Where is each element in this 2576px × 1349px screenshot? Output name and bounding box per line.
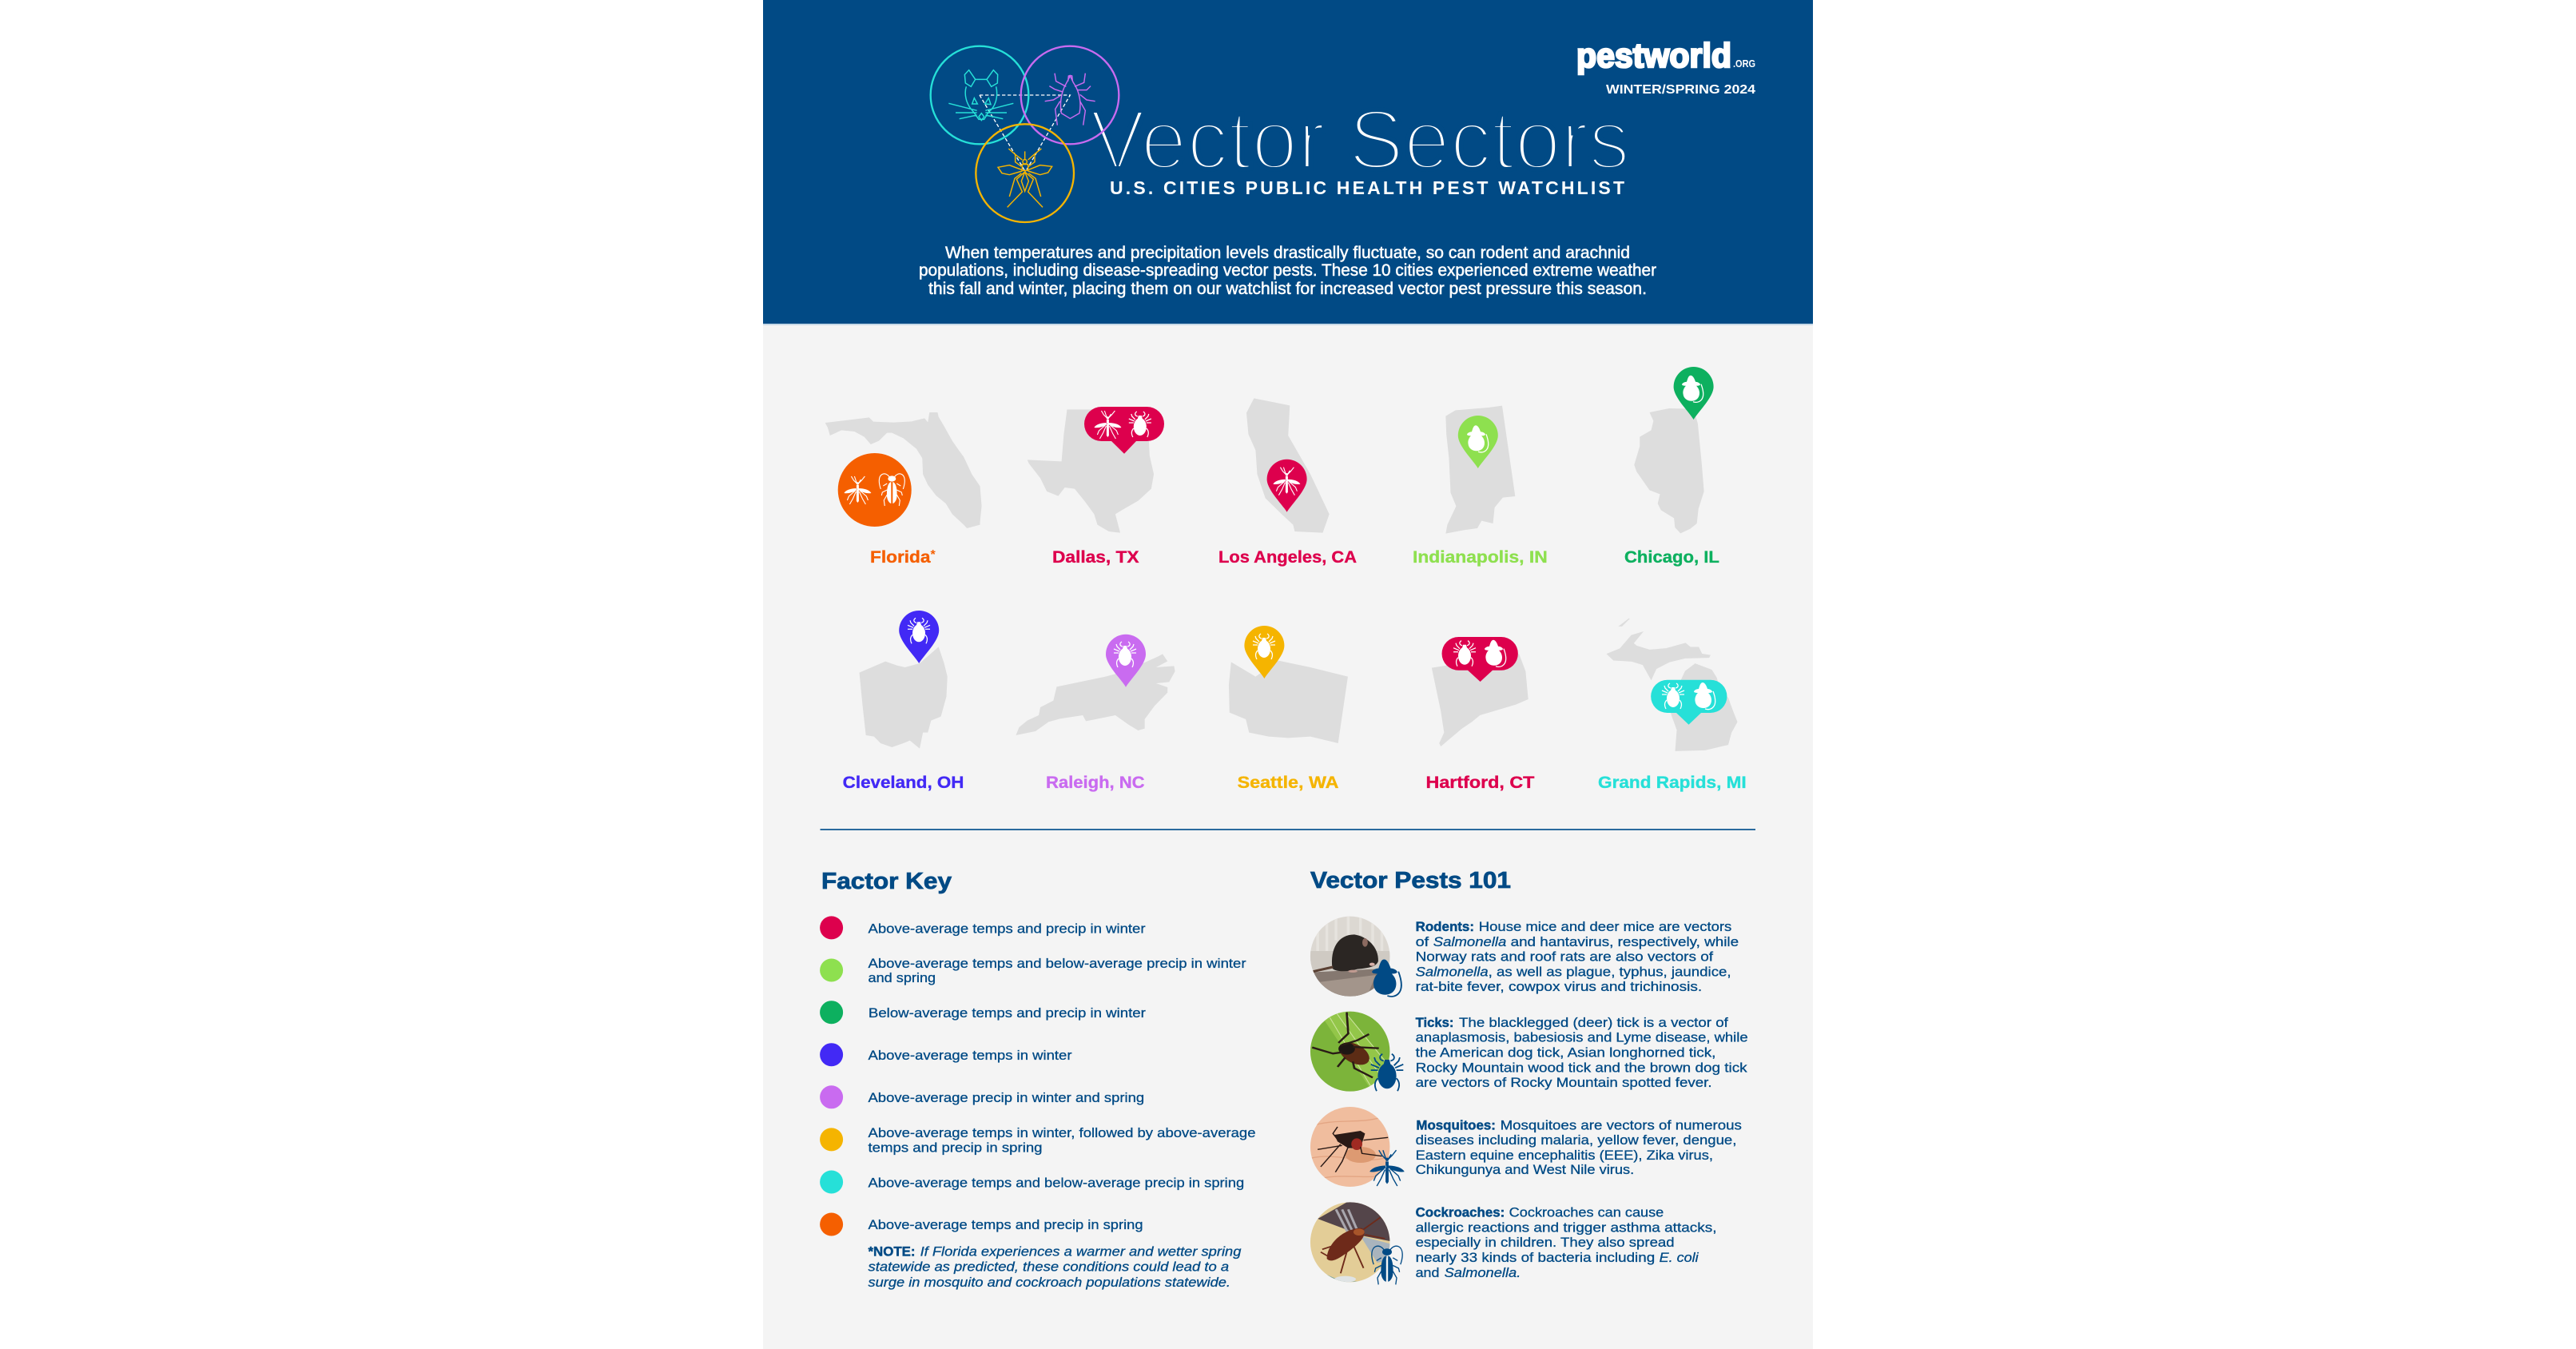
key row 7 bbox=[820, 1170, 1244, 1194]
note: surge in mosquito and cockroach populations statewide. bbox=[868, 1275, 1230, 1290]
map: Indiana bbox=[1445, 406, 1515, 534]
photo: tick bbox=[1309, 1009, 1391, 1093]
key row 8: Above-average temps and precip in spring bbox=[868, 1217, 1143, 1232]
key row 6: Above-average temps in winter, followed by above-average bbox=[868, 1125, 1256, 1140]
text: mosquitoes: Mosquitoes: bbox=[1416, 1117, 1496, 1132]
marker: Florida circle bbox=[838, 453, 912, 527]
label: Dallas: Dallas, TX bbox=[1052, 548, 1139, 567]
pest: cockroaches bbox=[1309, 1201, 1717, 1284]
photo: rat bbox=[1309, 915, 1391, 997]
panel: city maps bbox=[825, 367, 1747, 792]
marker: Cleveland pin bbox=[899, 611, 939, 663]
note: *NOTE: bbox=[868, 1244, 916, 1259]
heading: Factor Key: Factor Key bbox=[821, 869, 952, 894]
city: Grand Rapids bbox=[1598, 619, 1747, 792]
text: rodents: Salmonella bbox=[1416, 965, 1489, 980]
icon: mosquito bbox=[1369, 1150, 1405, 1186]
text: mosquitoes bbox=[1416, 1117, 1742, 1177]
text: ticks: The blacklegged (deer) tick is a vector of bbox=[1459, 1015, 1728, 1030]
title: Vector Sectors bbox=[1090, 93, 1630, 187]
city: Seattle bbox=[1229, 626, 1348, 792]
circle: yellow bbox=[976, 124, 1074, 222]
icon: rodent bbox=[1372, 960, 1401, 997]
key row 6: temps and precip in spring bbox=[868, 1140, 1042, 1156]
subtitle: U.S. CITIES PUBLIC HEALTH PEST WATCHLIST bbox=[1110, 177, 1624, 198]
icon: tick outline bbox=[1045, 74, 1095, 125]
marker: Seattle pin bbox=[1244, 626, 1284, 678]
text: rodents: rat-bite fever, cowpox virus and trichinosis. bbox=[1416, 979, 1702, 994]
text: rodents: Salmonella bbox=[1433, 934, 1506, 949]
note: statewide as predicted, these conditions could lead to a bbox=[868, 1259, 1229, 1274]
circle: teal bbox=[931, 46, 1028, 144]
intro text bbox=[919, 244, 1656, 298]
text: cockroaches: E. coli bbox=[1660, 1250, 1699, 1265]
marker: Chicago pin bbox=[1674, 367, 1714, 420]
map: Florida bbox=[825, 412, 982, 528]
text: ticks: the American dog tick, Asian longhorned tick, bbox=[1416, 1045, 1715, 1060]
label: Grand Rapids: Grand Rapids, MI bbox=[1598, 774, 1747, 792]
text: cockroaches: Cockroaches: bbox=[1416, 1205, 1505, 1220]
text: ticks: Rocky Mountain wood tick and the brown dog tick bbox=[1416, 1060, 1747, 1075]
city: Chicago bbox=[1624, 367, 1719, 567]
intro text: When temperatures and precipitation levels drastically fluctuate, so can rodent and arachnid bbox=[945, 244, 1630, 262]
text: cockroaches: Cockroaches can cause bbox=[1509, 1205, 1664, 1220]
map: Washington bbox=[1229, 661, 1348, 743]
text: ticks: are vectors of Rocky Mountain spotted fever. bbox=[1416, 1075, 1712, 1090]
photo: mosquito bbox=[1309, 1105, 1391, 1188]
map: Michigan bbox=[1607, 619, 1737, 750]
map: Ohio bbox=[860, 647, 948, 749]
key row 2 bbox=[820, 956, 1246, 985]
label: Florida: * bbox=[930, 548, 936, 562]
label: Indianapolis: Indianapolis, IN bbox=[1413, 548, 1548, 567]
key row 1: Above-average temps and precip in winter bbox=[868, 921, 1146, 936]
key row 6 bbox=[820, 1125, 1256, 1156]
emblem: three vector circles bbox=[931, 46, 1119, 222]
label: Seattle: Seattle, WA bbox=[1238, 774, 1339, 792]
text: rodents: and hantavirus, respectively, while bbox=[1511, 934, 1739, 949]
dashed connection triangle bbox=[980, 95, 1070, 172]
marker: Raleigh pin bbox=[1106, 635, 1146, 687]
text: rodents: Norway rats and roof rats are also vectors of bbox=[1416, 949, 1713, 965]
city: Indianapolis bbox=[1413, 406, 1548, 567]
label: Cleveland: Cleveland, OH bbox=[843, 774, 964, 792]
marker: Dallas bubble bbox=[1084, 407, 1164, 454]
pest: ticks bbox=[1309, 1009, 1748, 1093]
key row 2: Above-average temps and below-average precip in winter bbox=[868, 956, 1246, 971]
text: mosquitoes: Eastern equine encephalitis (EEE), Zika virus, bbox=[1416, 1148, 1713, 1163]
label: Los Angeles: Los Angeles, CA bbox=[1218, 548, 1357, 567]
key row 3: Below-average temps and precip in winter bbox=[869, 1005, 1146, 1021]
intro text: populations, including disease-spreading vector pests. These 10 cities experienced extreme weather bbox=[919, 261, 1656, 280]
label: Chicago: Chicago, IL bbox=[1624, 548, 1719, 567]
icon: tick bbox=[1371, 1054, 1403, 1091]
key row 4 bbox=[820, 1043, 1072, 1066]
panel: vector pests 101 bbox=[1309, 868, 1748, 1284]
key row 4: Above-average temps in winter bbox=[868, 1048, 1072, 1063]
note: If Florida experiences a warmer and wetter spring bbox=[920, 1244, 1242, 1259]
city: Florida bbox=[825, 412, 982, 567]
text: ticks bbox=[1416, 1015, 1748, 1090]
map: California bbox=[1246, 398, 1330, 533]
panel: factor key bbox=[820, 869, 1256, 1290]
text: cockroaches: and bbox=[1416, 1265, 1439, 1280]
key row 5: Above-average precip in winter and spring bbox=[868, 1090, 1144, 1105]
text: cockroaches bbox=[1416, 1205, 1717, 1280]
map: Connecticut bbox=[1432, 654, 1529, 746]
text: rodents: House mice and deer mice are vectors bbox=[1479, 919, 1731, 934]
circle: purple bbox=[1021, 46, 1119, 144]
icon: mosquito outline bbox=[998, 149, 1052, 207]
pest: rodents bbox=[1309, 915, 1739, 997]
city: Hartford bbox=[1425, 637, 1535, 792]
key row 3 bbox=[820, 1001, 1146, 1024]
edition label: WINTER/SPRING 2024 bbox=[1606, 83, 1755, 97]
photo: cockroach bbox=[1309, 1201, 1391, 1284]
text: rodents bbox=[1416, 919, 1739, 994]
text: cockroaches: nearly 33 kinds of bacteria including bbox=[1416, 1250, 1655, 1265]
map: Texas bbox=[1028, 409, 1154, 533]
text: rodents: Rodents: bbox=[1416, 919, 1474, 934]
text: ticks: Ticks: bbox=[1416, 1015, 1453, 1030]
marker: Hartford bubble bbox=[1442, 637, 1518, 682]
key row 2: and spring bbox=[868, 970, 936, 985]
label: Raleigh: Raleigh, NC bbox=[1046, 774, 1145, 792]
logo: pestworld: pestworld bbox=[1576, 37, 1731, 75]
text: cockroaches: Salmonella. bbox=[1445, 1265, 1521, 1280]
text: rodents: of bbox=[1416, 934, 1429, 949]
marker: Indianapolis pin bbox=[1458, 416, 1498, 468]
text: ticks: anaplasmosis, babesiosis and Lyme disease, while bbox=[1416, 1029, 1748, 1045]
label: Florida: Florida bbox=[870, 548, 931, 567]
text: cockroaches: especially in children. They also spread bbox=[1416, 1235, 1675, 1250]
pest: mosquitoes bbox=[1309, 1105, 1742, 1188]
marker: Grand Rapids bubble bbox=[1651, 680, 1727, 725]
marker: LA pin bbox=[1267, 460, 1307, 512]
text: rodents: , as well as plague, typhus, jaundice, bbox=[1489, 965, 1731, 980]
panel: page background bbox=[763, 0, 1813, 1349]
map: North Carolina bbox=[1016, 654, 1175, 735]
note bbox=[868, 1244, 1242, 1290]
city: Dallas bbox=[1028, 407, 1164, 567]
key row 8 bbox=[820, 1213, 1143, 1236]
icon: cockroach bbox=[1372, 1246, 1402, 1284]
city: Raleigh bbox=[1016, 635, 1175, 792]
intro text: this fall and winter, placing them on our watchlist for increased vector pest pressure this season. bbox=[928, 280, 1647, 298]
text: mosquitoes: Mosquitoes are vectors of numerous bbox=[1501, 1117, 1742, 1132]
label: Hartford: Hartford, CT bbox=[1425, 774, 1535, 792]
city: Cleveland bbox=[843, 611, 964, 792]
icon: rodent outline bbox=[948, 70, 1013, 121]
text: mosquitoes: diseases including malaria, yellow fever, dengue, bbox=[1416, 1132, 1736, 1148]
city: Los Angeles bbox=[1218, 398, 1357, 567]
text: cockroaches: allergic reactions and trigger asthma attacks, bbox=[1416, 1220, 1717, 1236]
panel: header bbox=[763, 0, 1813, 325]
map: Illinois bbox=[1634, 408, 1704, 533]
heading: Vector Pests 101: Vector Pests 101 bbox=[1310, 868, 1511, 893]
key row 7: Above-average temps and below-average precip in spring bbox=[868, 1175, 1244, 1191]
key row 5 bbox=[820, 1085, 1144, 1108]
text: mosquitoes: Chikungunya and West Nile virus. bbox=[1416, 1162, 1634, 1177]
key row 1 bbox=[820, 916, 1146, 939]
logo: pestworld: .ORG bbox=[1733, 58, 1755, 70]
